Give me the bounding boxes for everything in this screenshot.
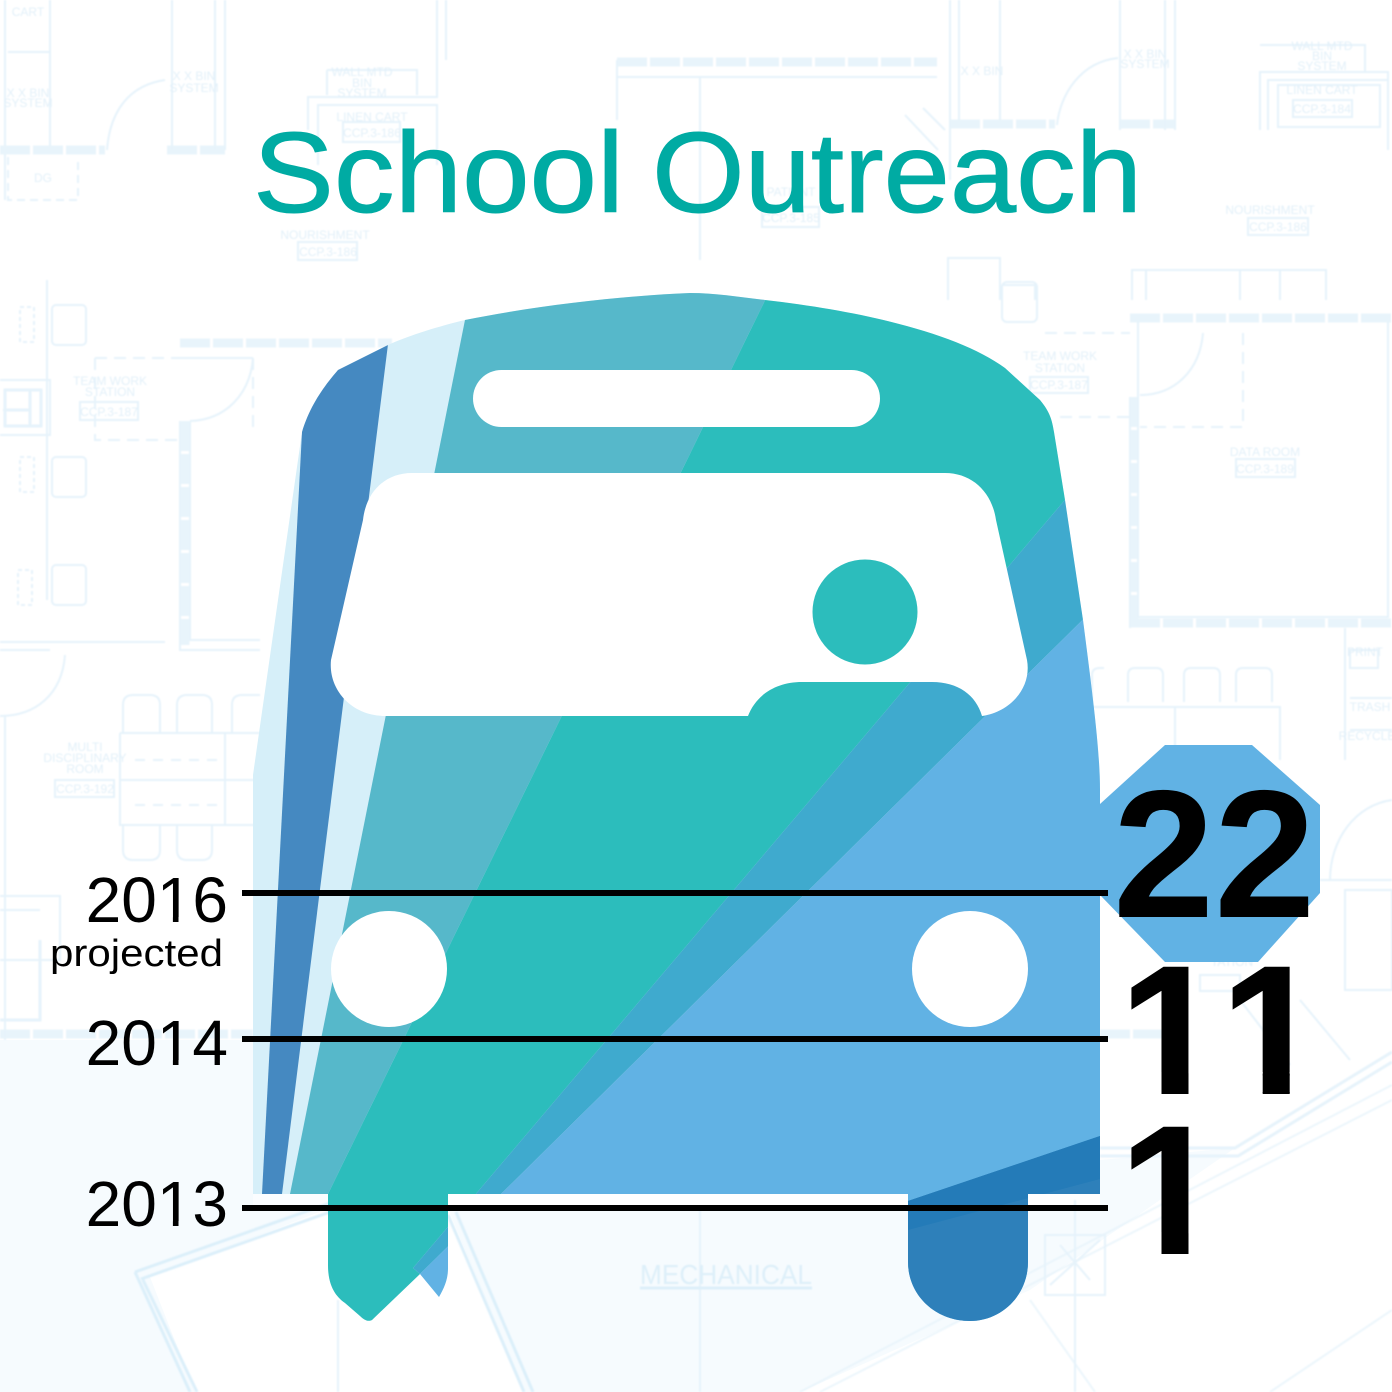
background: faint architectural blueprint: CCP.3-186 [299, 245, 357, 259]
value 22: 22 [1113, 752, 1315, 956]
background: faint architectural blueprint: M WOR [1211, 944, 1254, 958]
background: faint architectural blueprint: CCP.3-186 [343, 126, 401, 140]
background: faint architectural blueprint: BIN [1312, 49, 1332, 63]
background: faint architectural blueprint: CCP.3-187 [1030, 378, 1088, 392]
background: faint architectural blueprint: WALL MTD [331, 65, 393, 79]
background: faint architectural blueprint: TRASH [1350, 700, 1390, 714]
background: faint architectural blueprint: TEAM WORK [1023, 349, 1097, 363]
2013 marker line [242, 1205, 1108, 1211]
background: faint architectural blueprint: NOURISHMENT [280, 228, 370, 242]
background: faint architectural blueprint: CCP.3-192 [56, 782, 114, 796]
background: faint architectural blueprint: DATA ROOM [1230, 445, 1300, 459]
background: faint architectural blueprint: DG [34, 171, 52, 185]
background: faint architectural blueprint: STATION [85, 385, 135, 399]
background: faint architectural blueprint: CART [12, 5, 45, 19]
background: faint architectural blueprint: WALL MTD [1291, 39, 1353, 53]
bus illustration [240, 280, 1120, 1340]
driver head [812, 560, 918, 664]
background: faint architectural blueprint: TATION [1211, 955, 1253, 969]
year label 2013: 2013 [86, 1168, 228, 1240]
background: faint architectural blueprint: X X BIN [173, 69, 215, 83]
right headlight [912, 911, 1028, 1027]
background: faint architectural blueprint: SYSTEM [3, 96, 53, 110]
background: faint architectural blueprint: BIN [352, 76, 372, 90]
background: faint architectural blueprint: X X BIN [1124, 47, 1166, 61]
background: faint architectural blueprint: X X BIN [7, 86, 49, 100]
left headlight [331, 911, 447, 1027]
2014 marker line [242, 1036, 1108, 1042]
background: faint architectural blueprint: MECHANICAL [640, 1259, 812, 1290]
background: faint architectural blueprint: X X BIN [961, 64, 1003, 78]
title [253, 110, 1142, 237]
background: faint architectural blueprint: MULTI [67, 740, 103, 754]
background: faint architectural blueprint: CCP.3-184 [1293, 102, 1351, 116]
background: faint architectural blueprint: PRINT [1347, 645, 1384, 659]
background: faint architectural blueprint: SYSTEM [1297, 59, 1347, 73]
value 1: 1 [1120, 1088, 1221, 1292]
background: faint architectural blueprint: CCP.3-186 [1249, 220, 1307, 234]
background: faint architectural blueprint: TEAM WORK [73, 374, 147, 388]
stop-sign octagon [1100, 745, 1320, 962]
background: faint architectural blueprint: ROOM [66, 762, 104, 776]
year label 2016: 2016 [86, 864, 228, 936]
year label 2014: 2014 [86, 1007, 228, 1079]
value 11: 11 [1120, 928, 1322, 1132]
background: faint architectural blueprint: DISCIPLINARY [43, 751, 127, 765]
background: faint architectural blueprint: PATIENT [767, 185, 816, 199]
title: Outreach [652, 110, 1142, 237]
background: faint architectural blueprint: LINEN CART [336, 110, 408, 124]
2016 marker line [242, 890, 1108, 896]
background: faint architectural blueprint: SYSTEM [1120, 57, 1170, 71]
background: faint architectural blueprint: SYSTEM [169, 81, 219, 95]
background: faint architectural blueprint: CCP.3-187 [80, 405, 138, 419]
title: School [253, 110, 624, 237]
background: faint architectural blueprint: NOURISHMENT [1225, 203, 1315, 217]
windshield with driver shoulders cutout [331, 473, 1028, 716]
background: faint architectural blueprint: CCP.3-185 [762, 211, 820, 225]
bus body colour bands [240, 280, 1120, 1340]
projected label: projected [50, 933, 223, 975]
background: faint architectural blueprint: LINEN CART [1286, 83, 1358, 97]
destination sign window [473, 370, 880, 427]
background: faint architectural blueprint: CCP.3-189 [1236, 462, 1294, 476]
background: faint architectural blueprint: SYSTEM [337, 86, 387, 100]
background: faint architectural blueprint: STATION [1035, 361, 1085, 375]
